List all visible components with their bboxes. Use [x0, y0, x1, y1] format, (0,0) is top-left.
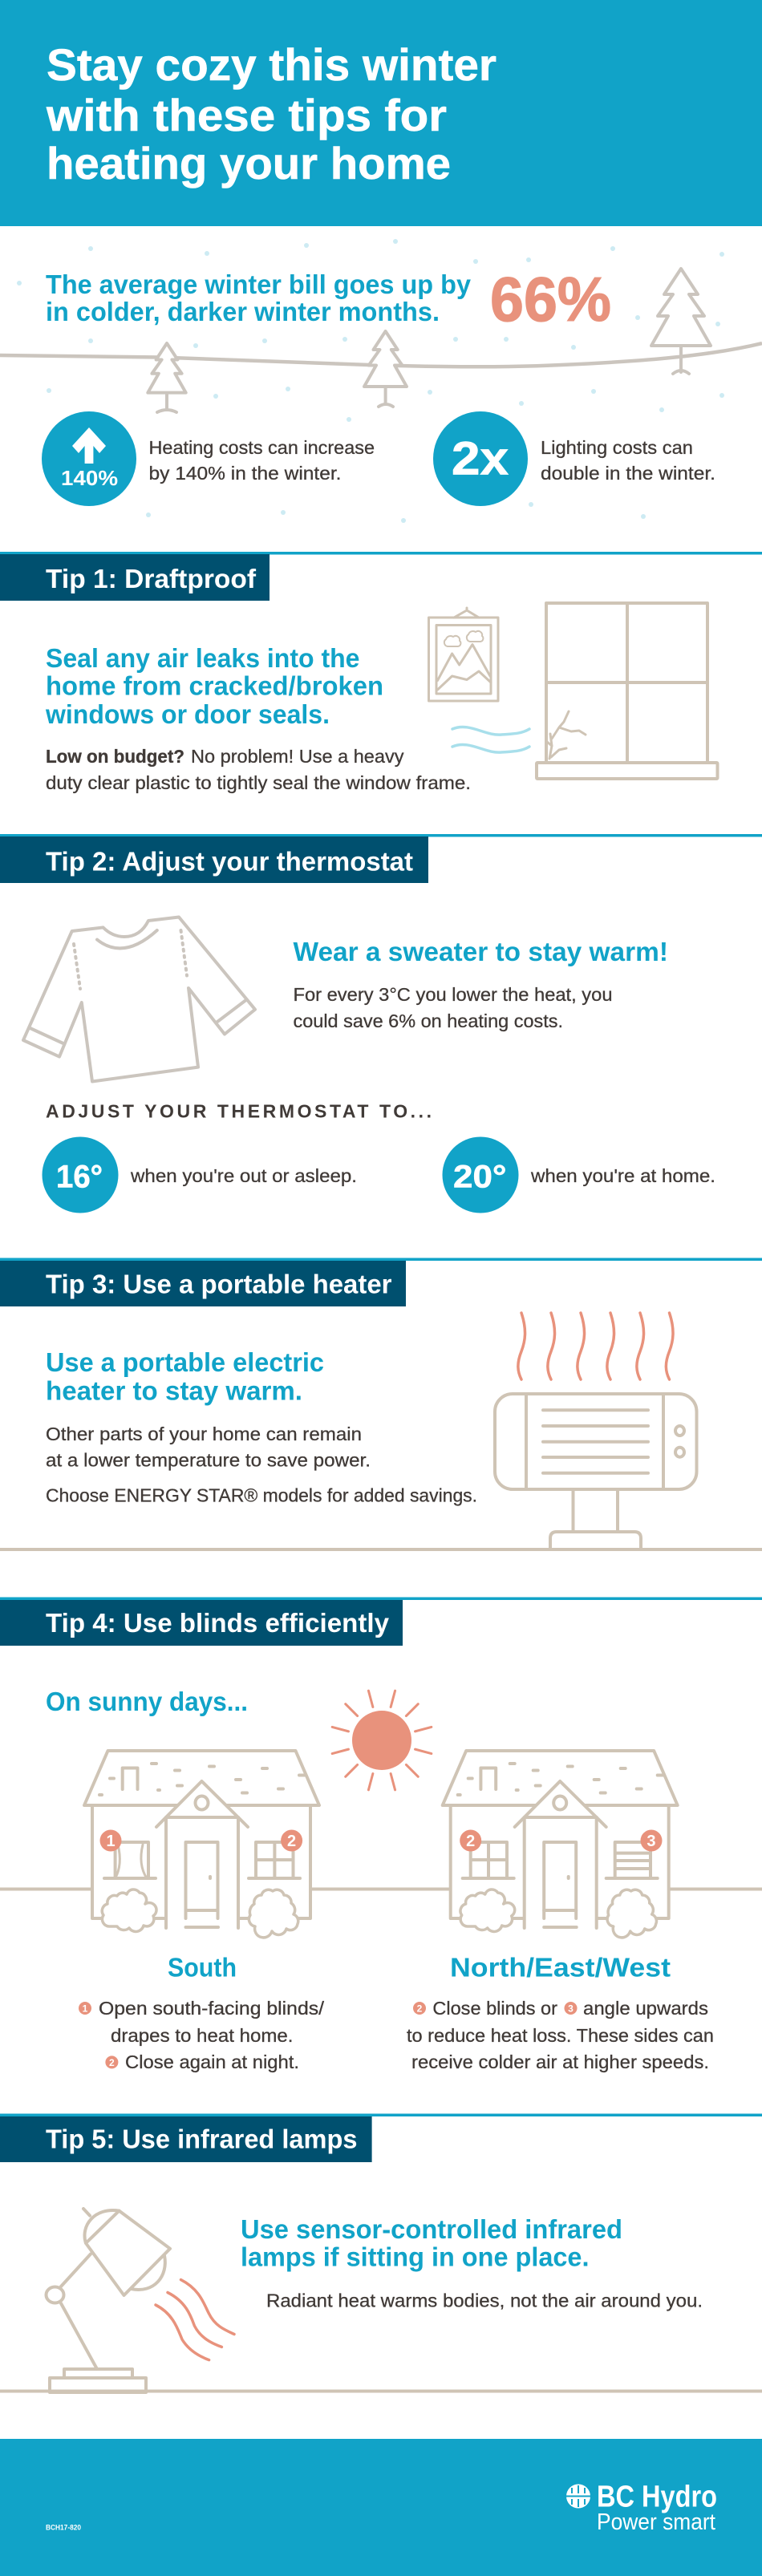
panel: winter bill — [0, 239, 762, 523]
tip 1 body: No problem! Use a heavy — [191, 746, 404, 767]
north east west column — [407, 1952, 714, 2072]
column badge 2 — [413, 2002, 426, 2015]
tip 5 heading: Tip 5: Use infrared lamps — [46, 2124, 358, 2154]
badge 2 — [281, 1830, 302, 1851]
tip 3 body — [46, 1424, 477, 1506]
south badge 2 — [105, 2056, 118, 2068]
title: heating your home — [47, 138, 451, 188]
icon: large tree — [651, 269, 711, 374]
tip 1 subheading: windows or door seals. — [45, 699, 330, 729]
tip 3 heading — [0, 1261, 406, 1306]
tip 4 heading — [0, 1600, 403, 1646]
icon: heat waves — [518, 1313, 673, 1379]
tip 3 body: Choose ENERGY STAR® models for added savings. — [46, 1485, 477, 1506]
south badge 1: 1 — [83, 2003, 88, 2015]
stat: 16 degrees: 16° — [56, 1160, 103, 1195]
tip 1 subheading: Seal any air leaks into the — [46, 643, 359, 673]
tip 3 heading: Tip 3: Use a portable heater — [46, 1270, 392, 1299]
tip 5 subheading: lamps if sitting in one place. — [241, 2242, 589, 2272]
north east west column: to reduce heat loss. These sides can — [407, 2025, 714, 2046]
south column: Close again at night. — [125, 2051, 299, 2072]
tip 3 body: at a lower temperature to save power. — [46, 1450, 371, 1471]
ground curve — [0, 343, 762, 367]
title: Stay cozy this winter — [47, 39, 497, 90]
panel: tip 3 — [0, 1258, 762, 1551]
stat: 20 degrees: 20° — [453, 1160, 507, 1195]
bill heading: in colder, darker winter months. — [46, 297, 440, 326]
icon: desk lamp — [47, 2209, 170, 2392]
tip 3 body: Other parts of your home can remain — [46, 1424, 362, 1444]
tip 2 heading — [0, 836, 428, 883]
south column: drapes to heat home. — [111, 2025, 294, 2046]
tip 1 heading: Tip 1: Draftproof — [46, 564, 257, 593]
icon: draft wind — [452, 727, 529, 752]
badge 1 — [99, 1830, 122, 1851]
south column: South — [168, 1952, 237, 1983]
stat: heating 140 percent: by 140% in the winter. — [149, 463, 342, 484]
sunny days heading: On sunny days... — [46, 1687, 248, 1716]
stat: lighting doubled: Lighting costs can — [541, 437, 693, 458]
66 percent figure: 66% — [490, 264, 611, 334]
floor line — [0, 1548, 762, 1551]
bill heading: The average winter bill goes up by — [46, 269, 472, 299]
tip 3 subheading: heater to stay warm. — [46, 1376, 302, 1406]
sweater body: could save 6% on heating costs. — [294, 1011, 563, 1031]
tip 5 subheading — [241, 2214, 622, 2272]
sweater body: For every 3°C you lower the heat, you — [294, 984, 613, 1005]
icon: framed picture — [428, 608, 498, 701]
column badge 2: 2 — [417, 2003, 423, 2015]
north east west column: receive colder air at higher speeds. — [411, 2051, 709, 2072]
tip 4 heading: Tip 4: Use blinds efficiently — [46, 1608, 390, 1638]
tip 1 subheading: home from cracked/broken — [46, 670, 383, 701]
badge 3: 3 — [646, 1833, 656, 1850]
icon: sweater — [23, 917, 255, 1081]
icon: south house — [84, 1751, 319, 1938]
stat: heating 140 percent: Heating costs can increase — [149, 437, 375, 458]
bill heading — [46, 269, 472, 326]
panel: tip 2 — [0, 834, 762, 1213]
tip 3 subheading: Use a portable electric — [46, 1347, 324, 1377]
tip 1 body: Low on budget? — [46, 746, 184, 767]
sweater body — [294, 984, 613, 1031]
stat: lighting doubled: 2x — [452, 433, 509, 484]
panel: tip 5 — [0, 2114, 762, 2393]
icon: up arrow — [72, 427, 106, 464]
tip 1 heading — [0, 554, 270, 601]
tip 1 body — [46, 746, 471, 793]
panel: tip 4 — [0, 1598, 762, 2072]
badge 1: 1 — [106, 1833, 116, 1850]
badge 2: 2 — [287, 1833, 296, 1850]
title — [46, 39, 497, 188]
badge 2 — [460, 1830, 481, 1851]
tip 2 heading: Tip 2: Adjust your thermostat — [46, 847, 413, 876]
icon: north east west house — [443, 1751, 678, 1938]
document code: BCH17-820 — [46, 2524, 81, 2532]
tip 5 body: Radiant heat warms bodies, not the air around you. — [266, 2290, 703, 2311]
tip 1 subheading — [45, 643, 383, 729]
icon: sun — [332, 1691, 432, 1790]
column badge 3 — [565, 2002, 578, 2015]
stat: 20 degrees — [443, 1137, 715, 1213]
stat: 20 degrees: when you're at home. — [530, 1165, 715, 1186]
floor line — [0, 2390, 762, 2393]
snow dots — [17, 239, 724, 523]
stat: 16 degrees — [42, 1137, 357, 1213]
south column: Open south-facing blinds/ — [99, 1998, 325, 2019]
tip 5 subheading: Use sensor-controlled infrared — [241, 2214, 622, 2244]
sweater heading: Wear a sweater to stay warm! — [294, 937, 668, 966]
logo: BC Hydro — [566, 2481, 717, 2535]
stat: lighting doubled — [433, 411, 715, 506]
logo: BC Hydro: Power smart — [597, 2509, 715, 2535]
thermostat subheading: ADJUST YOUR THERMOSTAT TO... — [46, 1100, 432, 1121]
stat: lighting doubled: double in the winter. — [541, 463, 715, 484]
stat: heating 140 percent — [42, 411, 375, 506]
logo: BC Hydro: BC Hydro — [597, 2481, 717, 2514]
tip 5 heading — [0, 2116, 372, 2162]
tip 3 subheading — [46, 1347, 324, 1406]
panel: tip 1 — [0, 552, 762, 793]
north east west column: North/East/West — [450, 1952, 671, 1983]
south badge 2: 2 — [109, 2057, 115, 2068]
north east west column: angle upwards — [583, 1998, 708, 2019]
column badge 3: 3 — [568, 2003, 574, 2015]
header banner — [0, 0, 762, 226]
title: with these tips for — [46, 90, 447, 140]
stat: heating 140 percent: 140% — [61, 466, 118, 490]
icon: cracked window — [537, 603, 717, 779]
badge 2: 2 — [466, 1833, 475, 1850]
ground line — [0, 1888, 762, 1891]
north east west column: Close blinds or — [432, 1998, 557, 2019]
icon: small tree — [148, 343, 186, 412]
south column — [79, 1952, 325, 2072]
icon: medium tree — [364, 331, 407, 407]
icon: portable heater — [495, 1394, 696, 1549]
icon: infrared waves — [156, 2280, 234, 2360]
stat: 16 degrees: when you're out or asleep. — [130, 1165, 357, 1186]
badge 3 — [640, 1830, 663, 1851]
tip 1 body: duty clear plastic to tightly seal the window frame. — [46, 772, 471, 793]
south badge 1 — [79, 2002, 91, 2015]
footer — [0, 2439, 762, 2576]
